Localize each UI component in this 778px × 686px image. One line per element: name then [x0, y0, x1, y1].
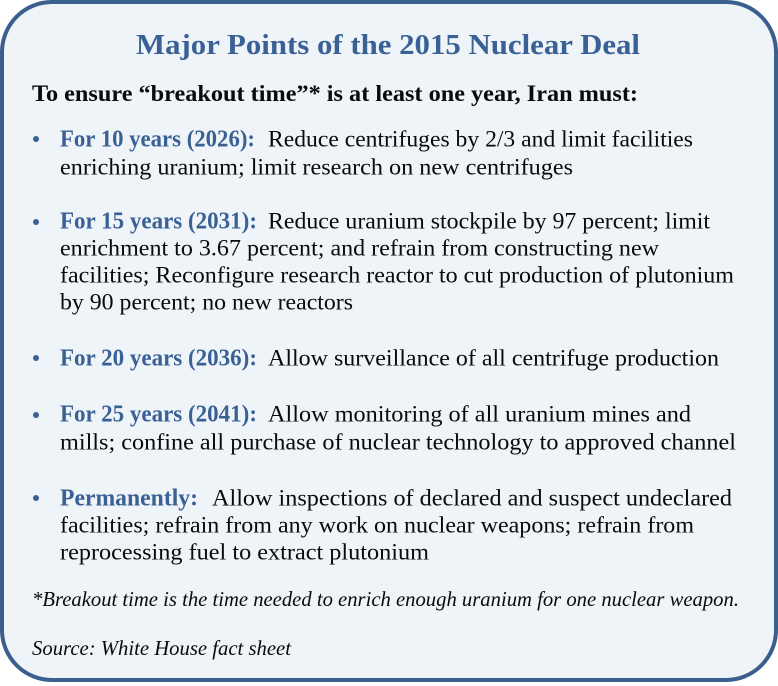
bullet: permanently: Permanently:	[60, 486, 198, 512]
bullet: for 25 years: Allow monitoring of all uranium mines and	[268, 402, 692, 427]
bullet: for 15 years: For 15 years (2031):	[60, 209, 257, 235]
bullet: for 25 years: For 25 years (2041):	[60, 402, 257, 428]
footnote: *Breakout time is the time needed to enrich enough uranium for one nuclear weapon.	[32, 587, 739, 611]
bullet: for 10 years	[33, 127, 693, 180]
source: Source: White House fact sheet	[32, 636, 292, 660]
bullet: for 10 years: enriching uranium; limit research on new centrifuges	[60, 155, 573, 180]
bullet: for 15 years: facilities; Reconfigure research reactor to cut production of plutonium	[60, 263, 734, 288]
bullet: for 15 years: enrichment to 3.67 percent; and refrain from constructing new	[60, 236, 659, 261]
bullet: for 25 years	[33, 402, 736, 455]
intro heading: To ensure “breakout time”* is at least one year, Iran must:	[32, 81, 638, 106]
bullet: for 20 years: For 20 years (2036):	[60, 346, 257, 372]
bullet: permanently: reprocessing fuel to extract plutonium	[60, 540, 429, 565]
bullet: permanently: facilities; refrain from any work on nuclear weapons; refrain from	[60, 513, 694, 538]
bullet: for 15 years: by 90 percent; no new reactors	[60, 290, 353, 315]
bullet: permanently	[33, 486, 733, 565]
bullet: for 25 years: mills; confine all purchase of nuclear technology to approved channel	[60, 430, 736, 455]
title: Major Points of the 2015 Nuclear Deal	[136, 29, 640, 61]
bullet: for 10 years: Reduce centrifuges by 2/3 and limit facilities	[268, 127, 693, 152]
bullet: for 10 years: For 10 years (2026):	[60, 127, 255, 153]
bullet: for 20 years	[33, 346, 720, 372]
bullet: for 15 years	[33, 209, 734, 315]
bullet: for 15 years: Reduce uranium stockpile by 97 percent; limit	[268, 209, 711, 234]
bullet: permanently: Allow inspections of declared and suspect undeclared	[212, 486, 733, 511]
bullet: for 20 years: Allow surveillance of all centrifuge production	[268, 346, 720, 371]
